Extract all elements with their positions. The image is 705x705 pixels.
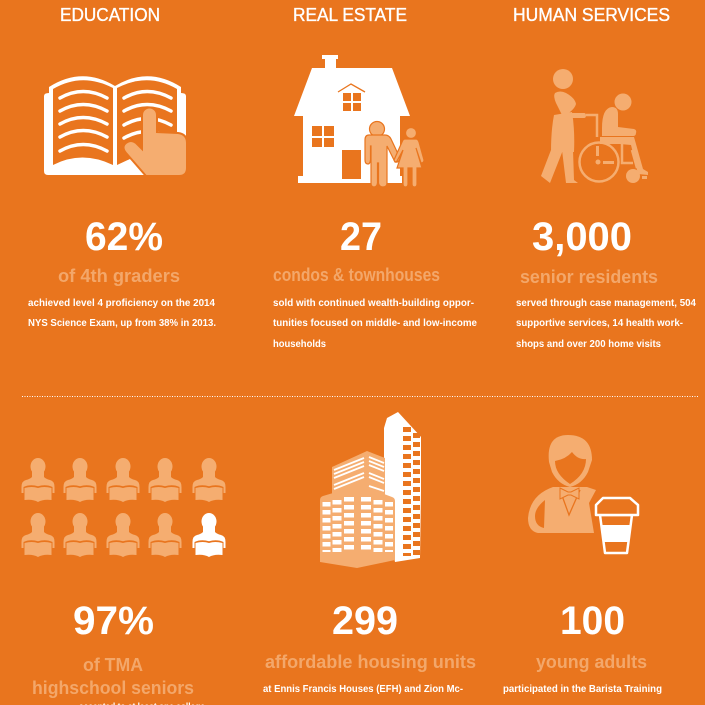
icon: caregiver pushing wheelchair	[541, 69, 648, 183]
subheading: of TMA highschool seniors	[32, 655, 194, 698]
icon: open book with pointing hand	[44, 76, 187, 176]
stat: 3,000: 3,000	[532, 215, 632, 259]
text block: human services detail: served through case management, 504	[516, 298, 696, 309]
subheading: senior residents: senior residents	[520, 267, 658, 287]
stat: 97 percent: 97%	[73, 599, 154, 643]
subheading: young adults: young adults	[536, 652, 647, 672]
subheading: condos and townhouses: condos & townhouses	[273, 265, 440, 285]
text block: human services detail: shops and over 200 home visits	[516, 339, 661, 350]
icon: apartment buildings	[320, 412, 421, 568]
text block: real estate detail	[273, 298, 477, 350]
subheading: of TMA highschool seniors: highschool seniors	[32, 678, 194, 698]
text block: education detail	[28, 298, 216, 329]
icon: house with two people	[294, 55, 424, 187]
subheading: of 4th graders: of 4th graders	[58, 266, 180, 286]
text block: education detail: achieved level 4 proficiency on the 2014	[28, 298, 215, 309]
text block: housing detail: at Ennis Francis Houses (EFH) and Zion Mc-	[263, 684, 463, 695]
subheading: of TMA highschool seniors: of TMA	[83, 655, 143, 675]
icon: barista with coffee cup	[528, 435, 638, 553]
text block: human services detail: supportive services, 14 health work-	[516, 318, 683, 329]
subheading: affordable housing units: affordable housing units	[265, 652, 476, 672]
stat: 27: 27	[340, 215, 382, 259]
icon: ten students reading, nine highlighted	[22, 458, 226, 557]
text block: human services detail	[516, 298, 696, 350]
text block: real estate detail: sold with continued wealth-building oppor-	[273, 298, 474, 309]
heading: real estate: REAL ESTATE	[293, 5, 407, 25]
stat: 62 percent: 62%	[85, 215, 163, 259]
text block: education detail: NYS Science Exam, up from 38% in 2013.	[28, 318, 216, 329]
stat: 100: 100	[560, 599, 625, 643]
text block: real estate detail: tunities focused on middle- and low-income	[273, 318, 477, 329]
text block: barista detail: participated in the Barista Training	[503, 684, 662, 695]
text block: real estate detail: households	[273, 339, 326, 350]
stat: 299: 299	[332, 599, 398, 643]
heading: education: EDUCATION	[60, 5, 160, 25]
heading: human services: HUMAN SERVICES	[513, 5, 670, 25]
